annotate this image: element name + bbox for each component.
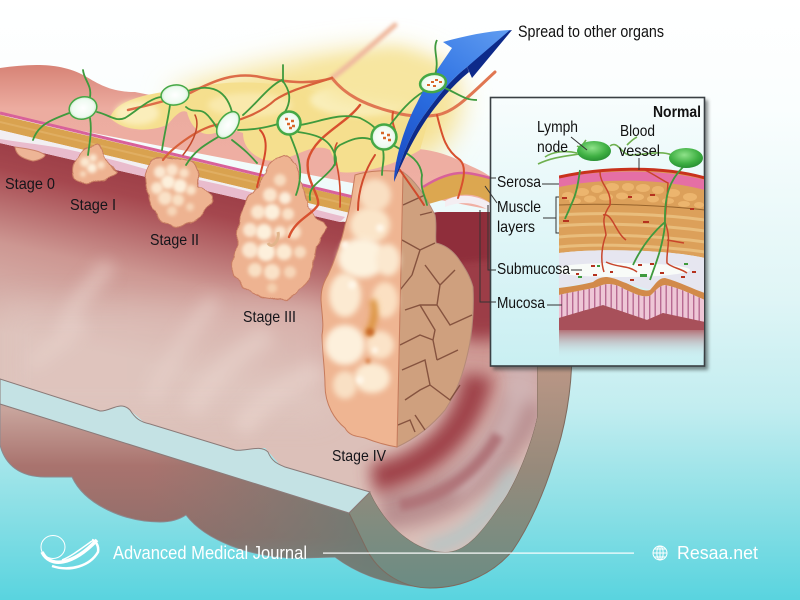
tumor stage I	[73, 145, 117, 184]
wall layers right	[423, 173, 490, 211]
exterior surface	[0, 65, 492, 210]
cut wall ring	[349, 350, 572, 588]
inset labels: layers	[497, 219, 535, 236]
stage labels: Stage I	[70, 197, 116, 214]
outer wall bumps	[0, 404, 420, 587]
cancerous lymph nodes	[278, 112, 396, 150]
inset leader lines	[480, 137, 639, 305]
inset labels: Mucosa	[497, 295, 545, 312]
stage labels: Stage IV	[332, 448, 386, 465]
tumor stage III	[233, 155, 327, 301]
interior lumen	[0, 143, 537, 552]
icon: globe	[653, 546, 667, 560]
lymph vessels	[33, 65, 427, 205]
tumor stage IV surface	[321, 171, 403, 447]
inset labels: Muscle	[497, 199, 541, 216]
footer logo	[41, 536, 98, 568]
footer website: Resaa.net	[677, 543, 758, 563]
heading: normal: Normal	[653, 104, 701, 121]
inset labels: Submucosa	[497, 261, 570, 278]
white lymph nodes	[67, 83, 244, 142]
tissue layers	[550, 167, 705, 358]
mesentery fat glow	[165, 50, 462, 160]
inset labels: node	[537, 139, 568, 156]
inset labels: Blood	[620, 123, 655, 140]
tumor stage IV cut face	[397, 172, 473, 447]
inset panel: normal tissue	[480, 98, 708, 370]
fat lobes	[110, 50, 455, 173]
inset labels: Serosa	[497, 174, 541, 191]
lymph node on arrow	[419, 40, 477, 100]
blood vessels	[128, 25, 495, 237]
inset labels: vessel	[619, 143, 660, 160]
inset labels: Lymph	[537, 119, 578, 136]
footer journal name: Advanced Medical Journal	[113, 543, 307, 563]
tumor stage II	[145, 157, 213, 227]
stage labels: Stage 0	[5, 176, 55, 193]
stage labels: Stage II	[150, 232, 199, 249]
stage labels: Stage III	[243, 309, 296, 326]
wall layers left	[0, 113, 355, 222]
footer divider line	[323, 552, 634, 554]
colon illustration	[0, 65, 572, 588]
label: spread to other organs: Spread to other organs	[518, 22, 664, 41]
cut wall band	[0, 379, 370, 513]
tumor stage 0	[15, 147, 45, 161]
inset labels	[497, 119, 660, 312]
arrow: spread to other organs	[394, 30, 512, 182]
lymph nodes and connecting vessels	[538, 137, 703, 168]
stage labels	[5, 176, 386, 465]
